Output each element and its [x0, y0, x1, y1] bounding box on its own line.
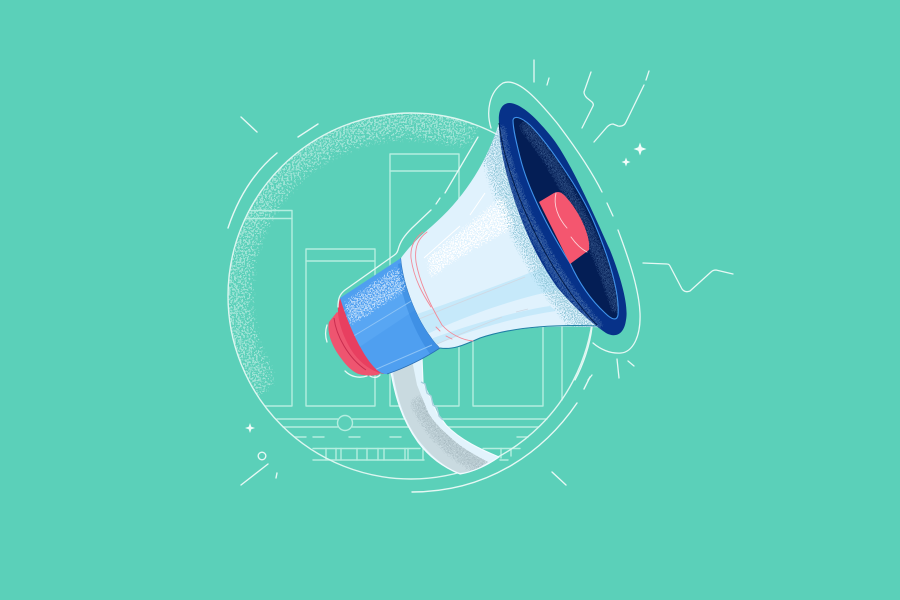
mouth interior [513, 117, 618, 319]
red end cap [328, 298, 384, 376]
ticks above mouth [533, 60, 535, 82]
icon: sparkle bottom left [245, 423, 255, 433]
street lines [277, 416, 547, 460]
lightning line two [594, 71, 649, 142]
horn bottom edge [440, 326, 598, 349]
megaphone [328, 103, 627, 474]
arc outline around horn [326, 82, 640, 380]
megaphone infographic illustration [227, 59, 734, 493]
decorative line accents around circle [228, 117, 590, 492]
lightning line one [582, 72, 593, 128]
white stipple on horn [426, 196, 514, 278]
road, bars and background lines [246, 154, 562, 460]
horn lower band [428, 306, 556, 345]
horn dark edge [499, 123, 597, 325]
pink collar lines [411, 232, 473, 341]
blue barrel [340, 258, 442, 374]
grain near mouth [496, 123, 604, 338]
icon: sparkle large [634, 142, 646, 156]
rim grain [499, 125, 600, 330]
icon: sparkle small [622, 158, 630, 166]
red speaker core [539, 192, 589, 264]
sound lines [534, 60, 733, 378]
mouth rim [499, 103, 627, 335]
horn light band [417, 267, 559, 334]
interior grain [522, 122, 619, 312]
large outline circle [228, 113, 594, 479]
bar chart [246, 154, 562, 406]
wave line [643, 263, 733, 292]
horn highlights and shade lines [412, 277, 528, 345]
ticks under mouth [617, 359, 619, 378]
handle [391, 358, 499, 474]
stipple texture inside circle [229, 116, 478, 397]
cone horn [401, 123, 612, 349]
